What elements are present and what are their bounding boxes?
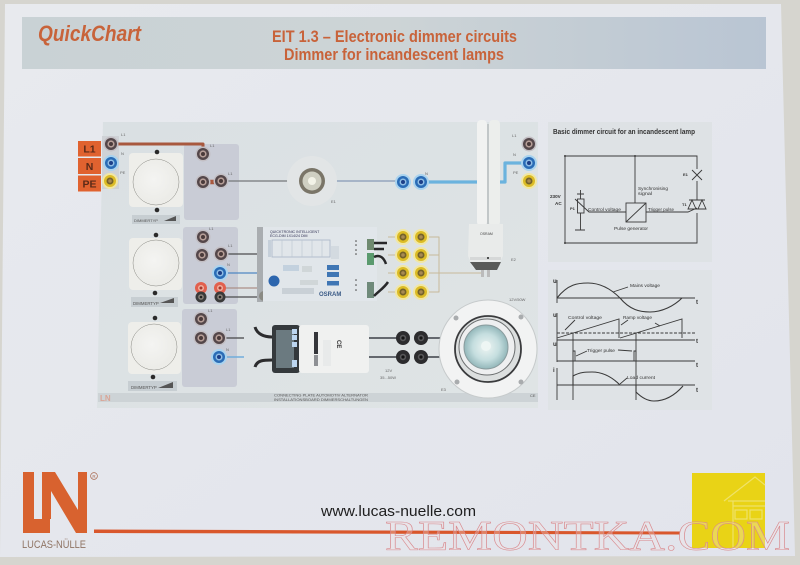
waveform chart (557, 280, 695, 401)
dimmer 1: DIMMERTYP (134, 218, 158, 223)
waveform labels: u (553, 342, 557, 348)
waveform labels: t (696, 300, 698, 306)
dimmer 1 (129, 150, 183, 224)
circuit labels: Pulse generator (614, 226, 648, 231)
icon: recessed halogen spotlight (439, 300, 537, 398)
socket labels: E3 (441, 387, 447, 392)
header band (22, 17, 766, 69)
logo: Lucas-Nülle (22, 472, 97, 551)
socket labels: L1 (208, 308, 213, 313)
watermark: REMONTKA.COM: REMONTKA.COM (385, 514, 790, 560)
circuit labels: P1 (570, 206, 576, 211)
waveform labels: Load current (627, 375, 656, 381)
waveform labels (553, 279, 698, 394)
logo: Lucas-Nülle: LUCAS-NÜLLE (22, 539, 86, 551)
board footer strip: CONNECTING PLATE AUTOMOTIV ALTERNATOR (274, 394, 368, 398)
icon: compact fluorescent lamp (468, 120, 503, 277)
wiring (111, 144, 529, 367)
socket labels: L1 (228, 171, 233, 176)
board footer strip: LN (100, 394, 111, 403)
transformer for halogen lamp: CE (335, 340, 341, 348)
panel: connecting plate board (78, 120, 538, 408)
circuit labels: Synchronising (638, 186, 668, 191)
socket labels: N (121, 151, 124, 156)
title: EIT 1.3 – Electronic dimmer circuits (272, 27, 517, 46)
socket labels: L1 (121, 132, 126, 137)
socket labels: PE (120, 170, 126, 175)
terminal labels L1 N PE: N (86, 161, 93, 173)
waveform labels: Mains voltage (630, 283, 660, 289)
circuit labels: Control voltage (588, 207, 621, 212)
footer rule (94, 530, 680, 534)
panel: basic dimmer circuit diagram (548, 122, 712, 262)
circuit labels: AC (555, 201, 562, 206)
socket labels: 35...50W (380, 375, 396, 380)
icon: E1 lamp holder (287, 156, 337, 206)
socket labels: PE (513, 170, 519, 175)
waveform labels: u (553, 279, 557, 285)
terminal labels L1 N PE (78, 141, 101, 192)
transformer for halogen lamp (272, 325, 369, 373)
socket labels: L1 (226, 327, 231, 332)
socket labels: E1 (331, 199, 337, 204)
socket labels: N (226, 347, 229, 352)
brand heading: QuickChart: QuickChart (38, 21, 142, 46)
socket labels: 12V (385, 368, 392, 373)
socket labels: N (513, 152, 516, 157)
OSRAM electronic ballast module: QUICKTRONIC INTELLIGENT (270, 230, 320, 234)
icon: yellow house square (692, 473, 765, 548)
terminal labels L1 N PE: PE (82, 178, 97, 190)
title: Dimmer for incandescent lamps (284, 45, 504, 64)
waveform labels: t (696, 388, 698, 394)
waveform labels: t (696, 363, 698, 369)
waveform labels: Ramp voltage (623, 315, 652, 321)
board footer strip (98, 393, 538, 403)
waveform labels: i (553, 368, 555, 374)
circuit schematic (565, 156, 706, 243)
circuit labels: 230V (550, 194, 562, 199)
circuit labels: signal (638, 191, 652, 196)
socket labels: L1 (210, 143, 215, 148)
circuit labels: T1 (682, 202, 687, 207)
waveform labels: Trigger pulse (587, 348, 615, 354)
circuit labels: E1 (683, 172, 689, 177)
circuit title: Basic dimmer circuit for an incandescent lamp (553, 129, 695, 136)
waveform labels: t (696, 339, 698, 345)
terminal labels L1 N PE: L1 (83, 144, 96, 156)
section panels (182, 144, 239, 387)
icon: compact fluorescent lamp: OSRAM (480, 232, 493, 236)
logo: Lucas-Nülle: R (92, 474, 96, 479)
waveform labels: Control voltage (568, 315, 602, 321)
OSRAM electronic ballast module: OSRAM (319, 292, 341, 298)
socket labels: L1 (228, 243, 233, 248)
socket labels: N (227, 262, 230, 267)
title (272, 27, 517, 64)
sockets (102, 136, 537, 365)
circuit labels (550, 172, 689, 231)
socket labels (120, 132, 526, 392)
dimmer 3: DIMMERTYP (131, 385, 157, 390)
OSRAM electronic ballast module: ECG-DIM 1X14/24 DIM (270, 234, 308, 238)
socket labels: L1 (512, 133, 517, 138)
board footer strip: CE (530, 393, 536, 398)
circuit labels: Trigger pulse (648, 207, 674, 212)
socket labels: E2 (511, 257, 517, 262)
dimmer 2: DIMMERTYP (133, 301, 159, 306)
board footer strip: INSTALLATIONSBOARD DIMMERSCHALTUNGEN (274, 398, 368, 402)
dimmer 3 (128, 316, 181, 391)
socket labels: 12V/50W (509, 297, 526, 302)
website url: www.lucas-nuelle.com (320, 504, 476, 520)
dimmer 2 (129, 233, 182, 307)
socket labels: N (425, 171, 428, 176)
panel: voltage and current waveforms (548, 270, 712, 410)
waveform labels: u (553, 313, 557, 319)
OSRAM electronic ballast module (257, 227, 388, 302)
socket labels: L1 (209, 226, 214, 231)
